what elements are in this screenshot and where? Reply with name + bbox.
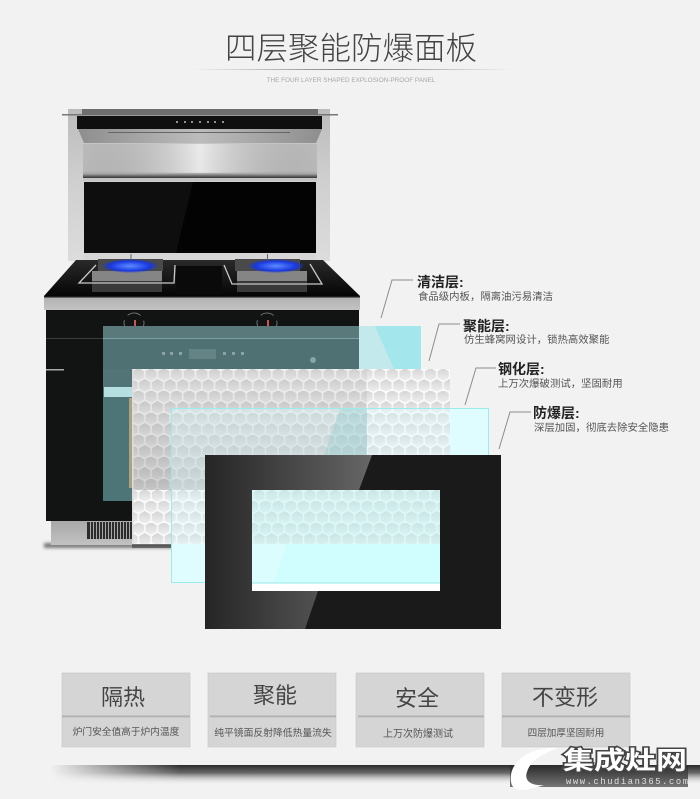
cabinet <box>44 310 359 548</box>
card: no deformation: 不变形 <box>532 685 598 710</box>
card: energy focus <box>208 673 336 747</box>
card: no deformation: 四层加厚坚固耐用 <box>528 727 604 739</box>
knob left <box>124 313 144 333</box>
card: energy focus: 纯平镜面反射降低热量流失 <box>214 726 332 739</box>
callout: clean layer: 清洁层: <box>417 274 464 290</box>
cooktop <box>44 254 360 310</box>
card: safety: 上万次防爆测试 <box>383 727 453 740</box>
card: energy focus: 聚能 <box>253 683 297 708</box>
subtitle: THE FOUR LAYER SHAPED EXPLOSION-PROOF PANEL <box>267 77 436 84</box>
subtitle rule <box>192 69 512 70</box>
range hood <box>62 109 338 261</box>
card: heat insulation: 炉门安全值高于炉内温度 <box>73 725 180 738</box>
left burner <box>79 254 175 292</box>
title: 四层聚能防爆面板 <box>225 30 477 66</box>
callout: tempered layer: 钢化层: <box>498 361 545 377</box>
callout: tempered layer <box>465 361 623 405</box>
callout: focus layer: 聚能层: <box>463 318 510 334</box>
callout: clean layer <box>381 274 553 318</box>
layer 1: clean layer glass <box>103 326 421 501</box>
callout: focus layer <box>429 318 609 361</box>
callout: focus layer: 仿生蜂窝网设计，锁热高效聚能 <box>464 333 609 346</box>
card: safety: 安全 <box>395 686 439 711</box>
callout: explosion-proof layer: 深层加固，彻底去除安全隐患 <box>534 421 669 434</box>
callout: clean layer: 食品级内板，隔离油污易清洁 <box>418 290 553 303</box>
icon: swoosh C <box>511 748 558 790</box>
watermark logo: 集成灶网 <box>563 747 687 775</box>
right burner <box>224 254 322 292</box>
knob right <box>257 313 277 333</box>
cabinet shadow below honeycomb <box>132 544 172 548</box>
card: heat insulation: 隔热 <box>101 685 145 710</box>
callout: explosion-proof layer: 防爆层: <box>533 405 580 421</box>
watermark logo <box>510 747 688 790</box>
card: safety <box>356 673 484 747</box>
layer 4: explosion-proof black panel <box>205 455 501 629</box>
bottom shadow strip <box>50 765 700 785</box>
product: integrated stove <box>44 109 360 548</box>
layer 2: honeycomb layer <box>132 369 450 544</box>
layer 3: tempered glass <box>172 408 488 582</box>
card: heat insulation <box>62 673 190 747</box>
callout: tempered layer: 上万次爆破测试，坚固耐用 <box>498 377 623 390</box>
watermark logo: www.chudian365.com <box>566 777 688 787</box>
callout: explosion-proof layer <box>499 405 669 449</box>
card: no deformation <box>502 673 630 747</box>
panel window <box>252 490 440 591</box>
